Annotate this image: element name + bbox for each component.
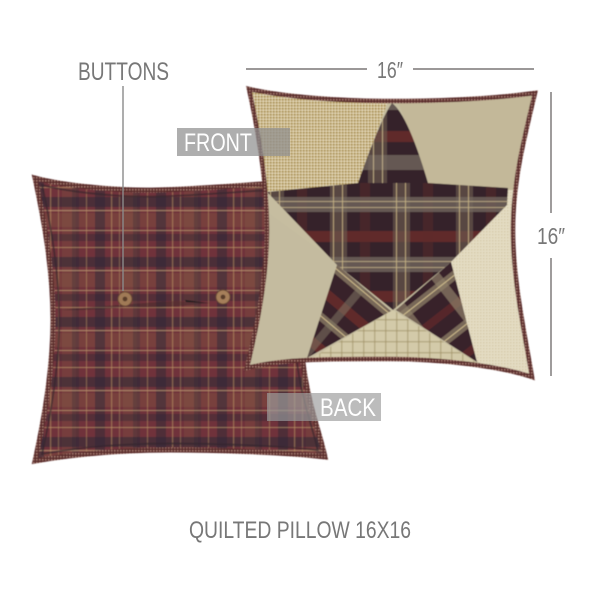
icon: left button — [118, 292, 132, 306]
width dimension: 16″ — [377, 57, 403, 83]
infographic: quilted pillow dimensions — [31, 62, 565, 542]
icon: right button — [216, 290, 230, 304]
patch: bottom light check — [314, 310, 474, 362]
leader line: buttons — [122, 86, 124, 291]
caption: QUILTED PILLOW 16X16 — [189, 517, 411, 544]
height dimension: 16″ — [537, 223, 565, 249]
label: back — [267, 393, 381, 422]
patch: left khaki — [240, 192, 337, 375]
front pillow — [240, 85, 540, 380]
label: back: BACK — [320, 394, 376, 422]
label: buttons: BUTTONS — [78, 58, 169, 86]
patch: right cream — [450, 190, 530, 374]
button tuck — [60, 301, 210, 310]
star — [267, 103, 508, 362]
patch: top right khaki — [392, 85, 540, 192]
back pillow — [30, 175, 330, 465]
flange seam — [42, 185, 318, 454]
patch: top left check — [252, 92, 387, 192]
label: front: FRONT — [184, 129, 252, 157]
